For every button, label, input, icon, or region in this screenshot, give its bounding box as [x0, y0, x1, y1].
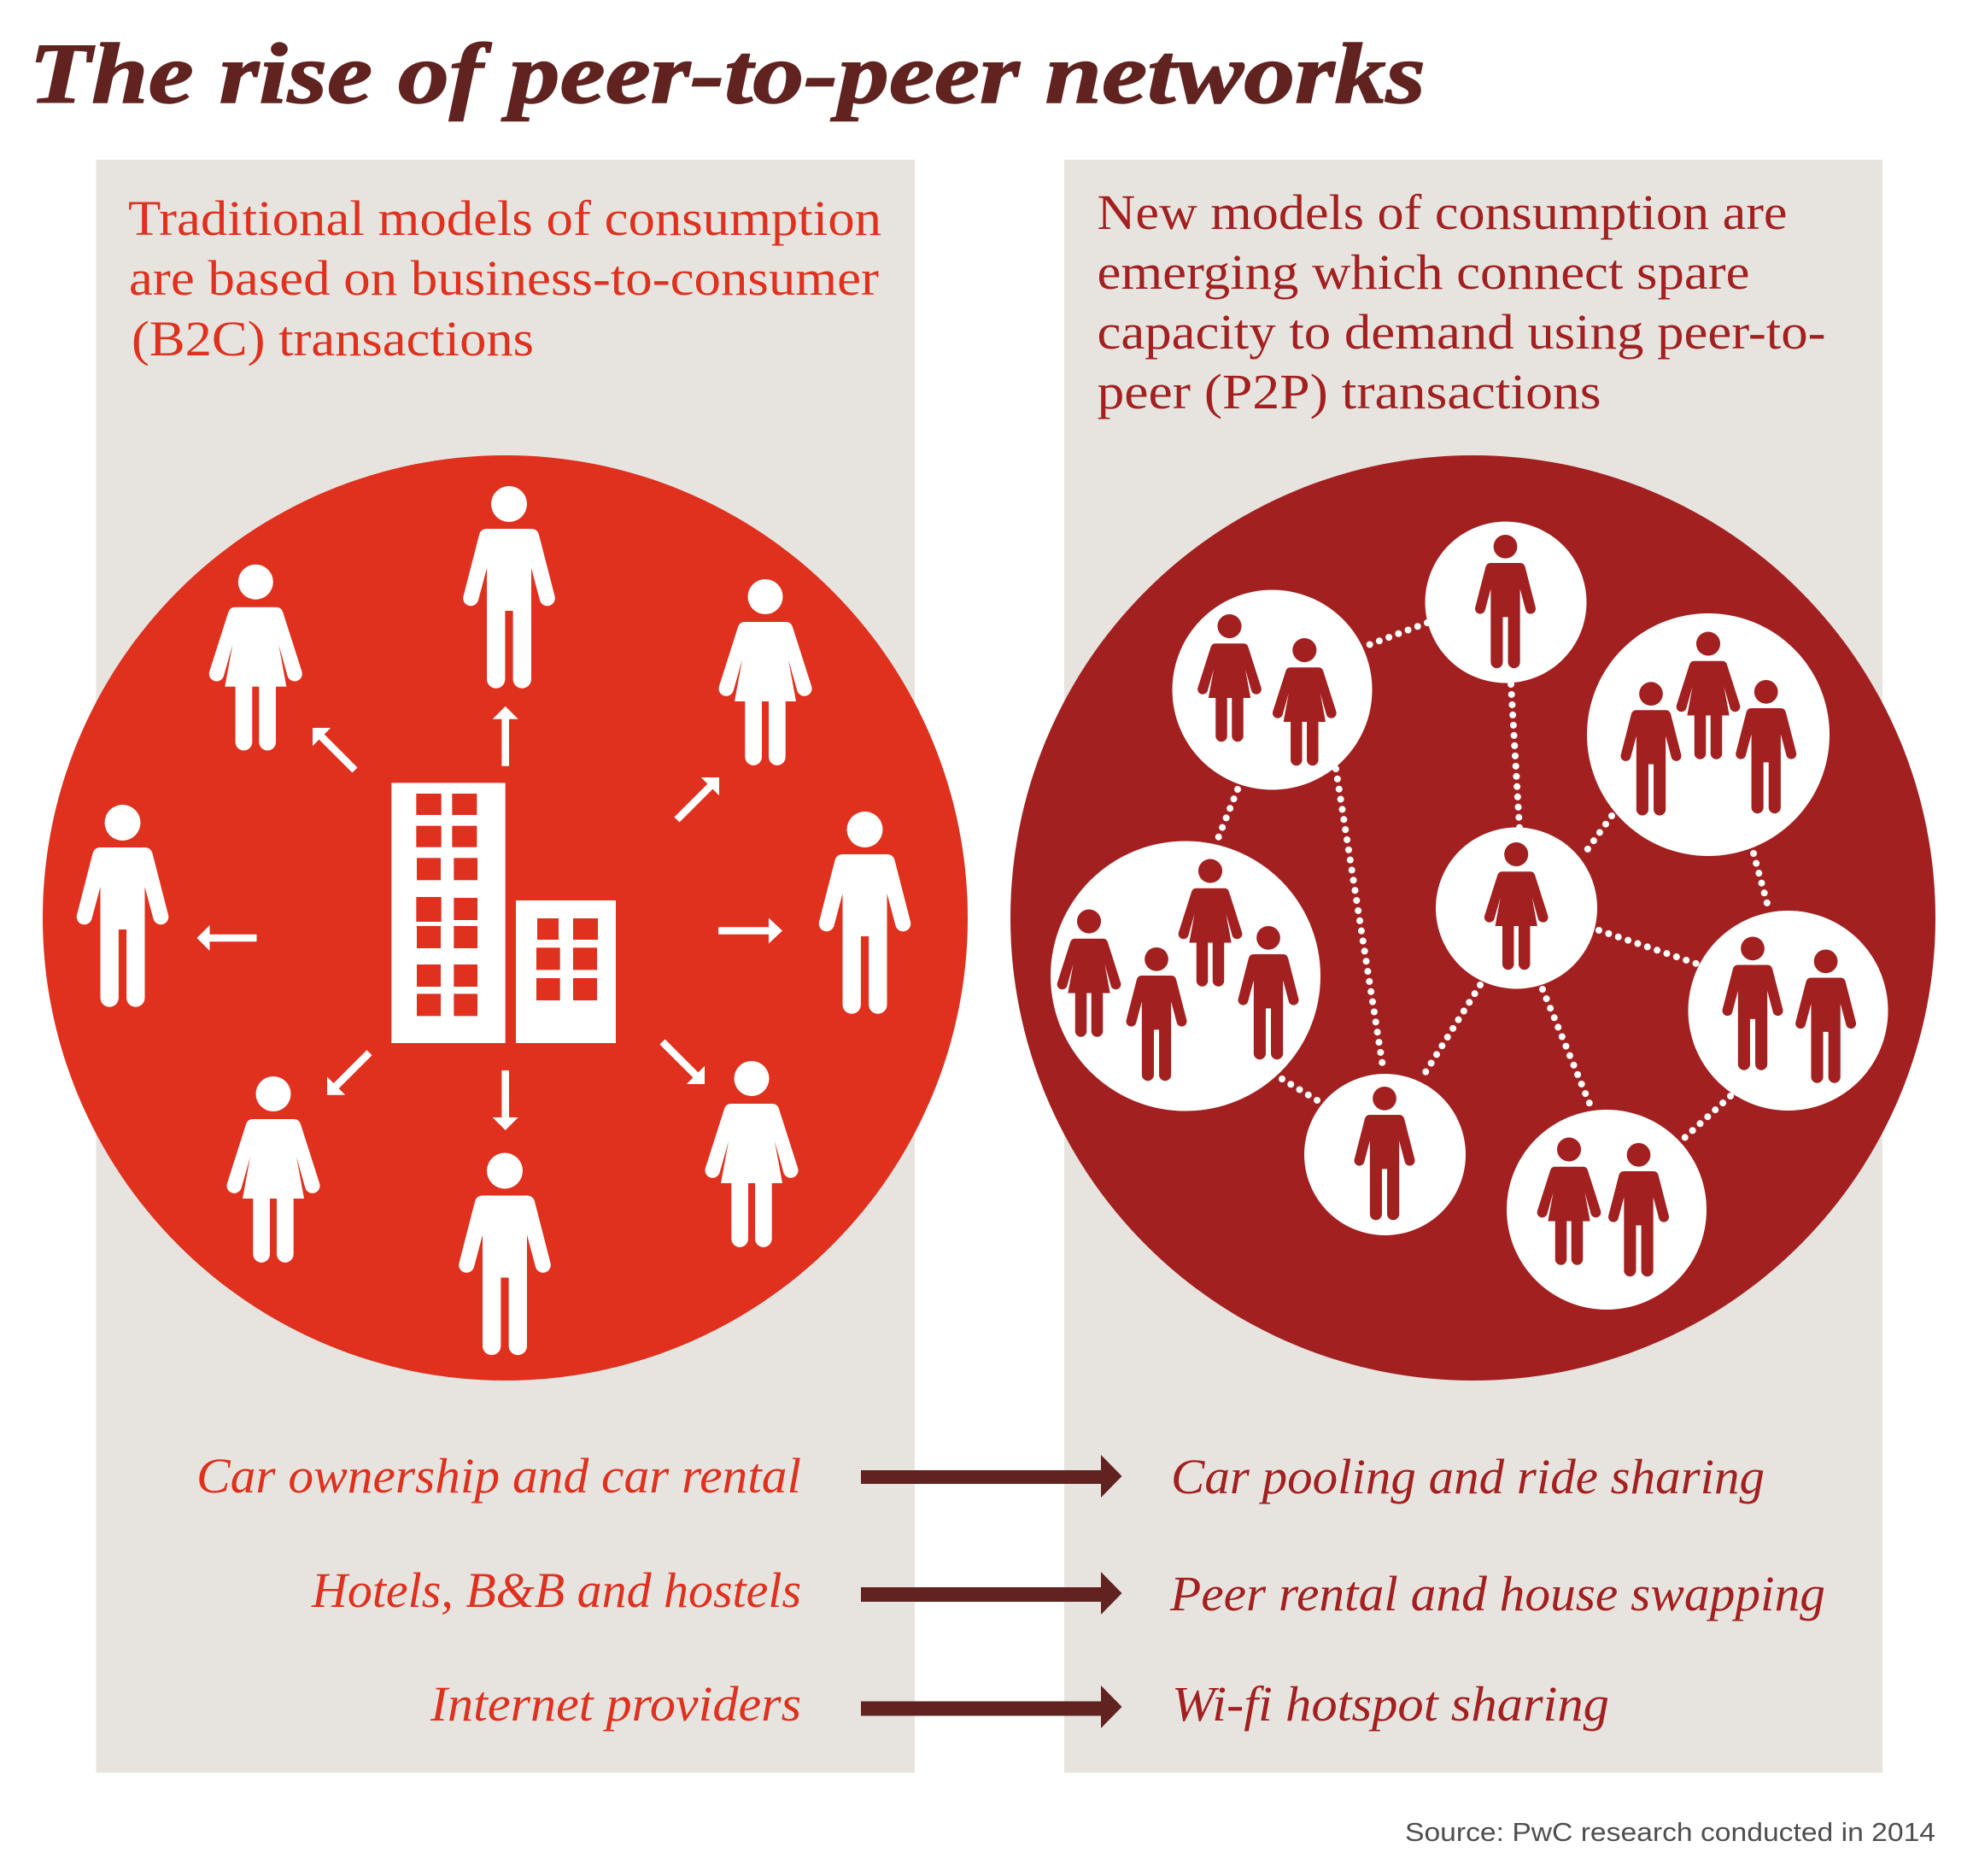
diagram: business-to-consumer circle — [43, 455, 968, 1381]
heading: traditional models text: Traditional models of consumption — [128, 191, 881, 246]
heading: new models text: peer (P2P) transactions — [1097, 364, 1601, 419]
network nodes — [1051, 521, 1888, 1310]
list: peer-to-peer services: Wi-fi hotspot sharing — [1172, 1676, 1609, 1732]
title: The rise of peer-to-peer networks — [29, 26, 1426, 121]
icon: office buildings — [391, 783, 616, 1043]
list: peer-to-peer services: Car pooling and ride sharing — [1171, 1449, 1765, 1504]
consumers around the buildings — [77, 486, 910, 1355]
heading: traditional models text: (B2C) transactions — [132, 311, 534, 366]
heading: new models text: capacity to demand using peer-to- — [1097, 304, 1826, 360]
heading: new models text: New models of consumption are — [1097, 185, 1787, 240]
list: peer-to-peer services — [1169, 1449, 1825, 1732]
panel: traditional models — [96, 160, 915, 1773]
heading: traditional models text — [128, 191, 881, 366]
heading: new models text: emerging which connect spare — [1097, 244, 1749, 300]
arrow: internet providers to wi-fi sharing — [861, 1685, 1122, 1728]
arrow: hotels to peer rental — [861, 1572, 1122, 1615]
arrow: car ownership to car pooling — [861, 1455, 1122, 1498]
list: traditional services: Hotels, B&B and hostels — [311, 1562, 801, 1618]
heading: new models text — [1097, 185, 1826, 419]
list: peer-to-peer services: Peer rental and house swapping — [1169, 1566, 1825, 1621]
list: traditional services: Car ownership and car rental — [196, 1448, 801, 1504]
panel: new models — [1064, 160, 1882, 1773]
source note: Source: PwC research conducted in 2014 — [1405, 1817, 1935, 1847]
list: traditional services: Internet providers — [430, 1676, 801, 1732]
diagram: peer-to-peer network circle — [1010, 455, 1935, 1381]
heading: traditional models text: are based on business-to-consumer — [129, 250, 879, 306]
people inside the nodes — [1057, 535, 1856, 1276]
arrows radiating from the buildings — [196, 706, 782, 1130]
list: traditional services — [196, 1448, 801, 1732]
dotted network connections — [1217, 623, 1769, 1139]
